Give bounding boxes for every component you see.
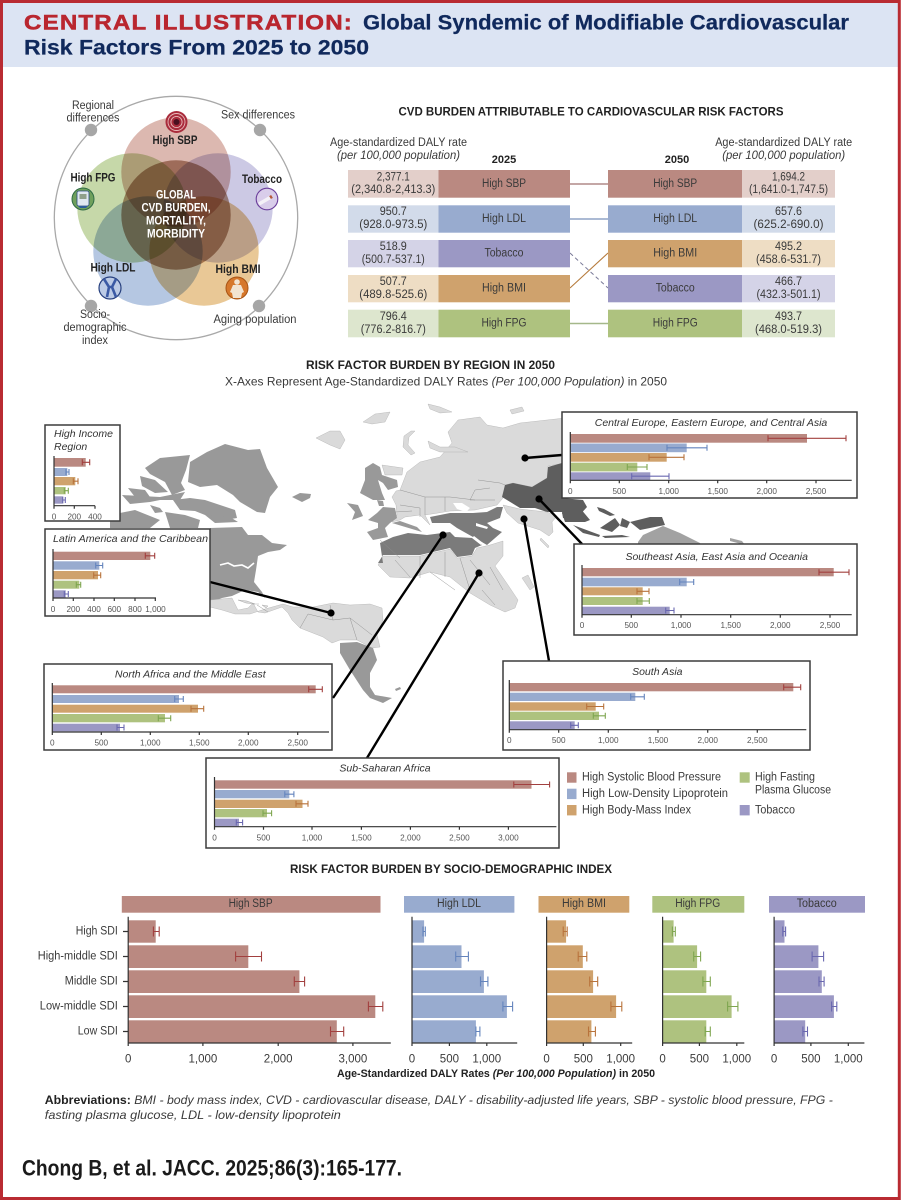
2050 column: High LDL bbox=[653, 213, 698, 225]
chart: Sub-Saharan Africa: 2,000 bbox=[400, 834, 421, 842]
chart: Central Europe, Eastern Europe, and Central Asia: 1,000 bbox=[658, 487, 679, 496]
risk factor labels: High LDL bbox=[90, 262, 136, 274]
abbreviations: fasting plasma glucose, LDL - low-density lipoprotein bbox=[45, 1108, 341, 1122]
column captions: Age-standardized DALY rate bbox=[330, 137, 467, 149]
chart: Southeast Asia, East Asia and Oceania: Southeast Asia, East Asia and Oceania bbox=[625, 551, 808, 563]
2025 column: (489.8-525.6) bbox=[359, 289, 427, 301]
venn circles bbox=[77, 117, 273, 306]
header band bbox=[3, 3, 898, 67]
chart: South Asia bbox=[503, 661, 810, 750]
2025 column: (2,340.8-2,413.3) bbox=[351, 184, 435, 196]
2025 column: 796.4 bbox=[380, 311, 407, 323]
chart: SDI High FPG: 0 bbox=[659, 1053, 666, 1065]
chart: SDI High SBP: 0 bbox=[125, 1053, 131, 1065]
context nodes bbox=[85, 124, 266, 312]
chart: Latin America and the Caribbean: 200 bbox=[66, 605, 81, 614]
risk factor labels: Tobacco bbox=[242, 174, 282, 186]
chart: SDI High FPG bbox=[652, 896, 751, 1065]
2025 column: High FPG bbox=[482, 318, 527, 330]
abbreviations: Abbreviations: BMI - body mass index, CVD - cardiovascular disease, DALY - disability-adjusted life years, SBP - systolic blood pressure, FPG - bbox=[45, 1093, 833, 1107]
chart: North Africa and the Middle East: 1,000 bbox=[140, 738, 161, 748]
chart: Sub-Saharan Africa: 1,000 bbox=[302, 834, 323, 842]
icon: cigarette bbox=[256, 188, 278, 210]
centre text bbox=[142, 187, 210, 241]
chart: Southeast Asia, East Asia and Oceania bbox=[574, 544, 857, 635]
chart: SDI High BMI: 1,000 bbox=[606, 1053, 635, 1065]
chart: Sub-Saharan Africa: 2,500 bbox=[449, 834, 470, 842]
2025 column: High BMI bbox=[482, 282, 526, 294]
chart: North Africa and the Middle East bbox=[44, 664, 332, 750]
chart: SDI High SBP bbox=[122, 896, 391, 1065]
2050 column bbox=[608, 170, 835, 337]
chart: Southeast Asia, East Asia and Oceania: 2,000 bbox=[770, 621, 791, 630]
chart: Central Europe, Eastern Europe, and Central Asia: Central Europe, Eastern Europe, and Central Asia bbox=[595, 417, 827, 429]
chart: Latin America and the Caribbean: Latin America and the Caribbean bbox=[53, 533, 208, 545]
chart: SDI row labels: Middle SDI bbox=[65, 975, 118, 987]
chart: Latin America and the Caribbean: 1,000 bbox=[145, 605, 166, 614]
chart: Latin America and the Caribbean: 400 bbox=[87, 605, 101, 614]
2025 column: (928.0-973.5) bbox=[359, 219, 427, 231]
caribbean islands bbox=[238, 600, 268, 608]
citation: Chong B, et al. JACC. 2025;86(3):165-177. bbox=[22, 1156, 402, 1180]
chart: SDI High SBP: 2,000 bbox=[264, 1053, 293, 1065]
2050 column: 466.7 bbox=[775, 276, 802, 288]
chart: High Income Region: 400 bbox=[88, 512, 102, 522]
2050 column: 493.7 bbox=[775, 311, 802, 323]
context labels: Socio- bbox=[80, 309, 110, 321]
title bbox=[24, 12, 849, 60]
heading: risk factor burden by region: X-Axes Represent Age-Standardized DALY Rates (Per 100,000 Population) in 2050 bbox=[225, 374, 667, 388]
legend: High Systolic Blood Pressure bbox=[582, 771, 721, 783]
context labels: index bbox=[82, 335, 108, 347]
risk factor labels: High SBP bbox=[152, 135, 198, 147]
chart: SDI row labels: Low SDI bbox=[78, 1025, 118, 1037]
chart: High Income Region: High Income bbox=[54, 428, 113, 440]
chart: North Africa and the Middle East: 500 bbox=[94, 738, 109, 748]
centre text: MORTALITY, bbox=[146, 214, 206, 228]
2025 column: 2,377.1 bbox=[377, 171, 410, 183]
2050 column: Tobacco bbox=[656, 282, 695, 294]
chart: SDI High FPG: High FPG bbox=[675, 898, 720, 910]
chart: SDI row labels: Low-middle SDI bbox=[40, 1000, 118, 1012]
chart: North Africa and the Middle East: 0 bbox=[50, 738, 55, 748]
chart: SDI High SBP: High SBP bbox=[229, 898, 273, 910]
russia and eastern europe bbox=[392, 417, 565, 525]
column captions: (per 100,000 population) bbox=[337, 150, 460, 162]
2050 column: High BMI bbox=[653, 248, 697, 260]
chart: SDI High BMI: High BMI bbox=[562, 898, 606, 910]
chart: SDI High LDL: 1,000 bbox=[472, 1053, 501, 1065]
chart: Latin America and the Caribbean: 800 bbox=[128, 605, 142, 614]
chart: SDI High SBP: 1,000 bbox=[189, 1053, 217, 1065]
latin america north bbox=[210, 598, 383, 648]
callout lines bbox=[210, 454, 582, 758]
chart: South Asia: South Asia bbox=[632, 666, 683, 678]
chart: SDI High LDL: 0 bbox=[409, 1053, 415, 1065]
2050 column: (432.3-501.1) bbox=[756, 289, 821, 301]
legend: High Low-Density Lipoprotein bbox=[582, 788, 728, 800]
chart: Southeast Asia, East Asia and Oceania: 1,000 bbox=[671, 621, 692, 630]
chart: SDI High LDL: High LDL bbox=[437, 898, 482, 910]
australia and new zealand bbox=[638, 526, 745, 546]
context labels: Sex differences bbox=[221, 109, 295, 121]
column captions: Age-standardized DALY rate bbox=[715, 137, 852, 149]
legend: High Body-Mass Index bbox=[582, 804, 691, 816]
chart: SDI Tobacco: 1,000 bbox=[834, 1053, 863, 1065]
chart: Latin America and the Caribbean: 600 bbox=[107, 605, 122, 614]
heading: risk factor burden by region bbox=[225, 360, 667, 388]
column captions bbox=[330, 137, 852, 166]
column captions: 2025 bbox=[492, 154, 516, 166]
chart: North Africa and the Middle East: North Africa and the Middle East bbox=[115, 669, 267, 681]
legend: Tobacco bbox=[755, 804, 795, 816]
icon: artery cross-section bbox=[166, 111, 188, 133]
panel: CVD burden table bbox=[330, 107, 852, 337]
chart: North Africa and the Middle East: 2,000 bbox=[238, 738, 259, 748]
chart: North Africa and the Middle East: 1,500 bbox=[189, 738, 210, 748]
chart: SDI High FPG: 500 bbox=[690, 1053, 709, 1065]
2050 column: 657.6 bbox=[775, 206, 802, 218]
chart: Southeast Asia, East Asia and Oceania: 500 bbox=[624, 621, 639, 630]
abbreviations bbox=[45, 1093, 833, 1122]
chart: Sub-Saharan Africa: 0 bbox=[212, 834, 217, 842]
context labels: Regional bbox=[72, 100, 114, 112]
2025 column: 507.7 bbox=[380, 276, 407, 288]
x axis title: Age-Standardized DALY Rates (Per 100,000 Population) in 2050 bbox=[337, 1068, 655, 1080]
heading: risk factor burden by SDI: RISK FACTOR BURDEN BY SOCIO-DEMOGRAPHIC INDEX bbox=[290, 864, 612, 876]
chart: SDI Tobacco: 500 bbox=[801, 1053, 820, 1065]
chart: Central Europe, Eastern Europe, and Central Asia bbox=[562, 412, 857, 498]
2050 column: 1,694.2 bbox=[772, 171, 805, 183]
inland seas bbox=[453, 503, 488, 545]
2025 column: High SBP bbox=[482, 178, 526, 190]
chart: Central Europe, Eastern Europe, and Central Asia: 1,500 bbox=[707, 487, 728, 496]
chart: SDI High FPG: 1,000 bbox=[722, 1053, 751, 1065]
title: CENTRAL ILLUSTRATION: bbox=[24, 12, 353, 34]
context labels: differences bbox=[66, 113, 120, 125]
heading: risk factor burden by region: RISK FACTOR BURDEN BY REGION IN 2050 bbox=[306, 360, 555, 372]
2050 column: (625.2-690.0) bbox=[754, 219, 824, 231]
chart: Sub-Saharan Africa: 3,000 bbox=[498, 834, 519, 842]
chart: SDI Tobacco: 0 bbox=[771, 1053, 777, 1065]
chart: South Asia: 0 bbox=[507, 736, 512, 745]
centre text: MORBIDITY bbox=[147, 227, 205, 241]
chart: SDI High BMI bbox=[538, 896, 635, 1065]
great lakes bbox=[220, 563, 254, 568]
chart: South Asia: 2,000 bbox=[697, 736, 718, 745]
chart: SDI High SBP: 3,000 bbox=[339, 1053, 367, 1065]
2050 column: 495.2 bbox=[775, 241, 802, 253]
chart: South Asia: 1,000 bbox=[598, 736, 619, 745]
chart: Southeast Asia, East Asia and Oceania: 2,500 bbox=[820, 621, 841, 630]
column captions: 2050 bbox=[665, 154, 689, 166]
2025 column: 518.9 bbox=[380, 241, 407, 253]
2025 column: (776.2-816.7) bbox=[361, 324, 426, 336]
chart: SDI High LDL: 500 bbox=[440, 1053, 459, 1065]
chart: SDI Tobacco bbox=[769, 896, 865, 1065]
2050 column: High SBP bbox=[653, 178, 697, 190]
2025 column bbox=[348, 170, 570, 337]
context labels bbox=[64, 100, 296, 347]
south asia bbox=[503, 505, 557, 536]
chart: Sub-Saharan Africa bbox=[206, 758, 559, 848]
2050 column: High FPG bbox=[653, 318, 698, 330]
chart: SDI High LDL bbox=[404, 896, 517, 1065]
legend: Plasma Glucose bbox=[755, 784, 831, 796]
falklands bbox=[395, 687, 401, 691]
world map bbox=[110, 404, 745, 703]
risk factor labels: High BMI bbox=[216, 264, 260, 276]
chart: Latin America and the Caribbean: 0 bbox=[51, 605, 56, 614]
heading: CVD BURDEN ATTRIBUTABLE TO CARDIOVASCULAR RISK FACTORS bbox=[398, 107, 784, 119]
north america and greenland bbox=[110, 444, 311, 603]
2025 column: (500.7-537.1) bbox=[362, 254, 425, 266]
chart: SDI High BMI: 500 bbox=[574, 1053, 593, 1065]
centre text: CVD BURDEN, bbox=[142, 201, 210, 215]
chart: Central Europe, Eastern Europe, and Central Asia: 0 bbox=[568, 487, 573, 496]
chart: SDI row labels: High SDI bbox=[76, 925, 118, 937]
2050 column: (1,641.0-1,747.5) bbox=[749, 184, 828, 196]
chart: SDI High BMI: 0 bbox=[543, 1053, 550, 1065]
2050 column: (458.6-531.7) bbox=[756, 254, 821, 266]
madagascar bbox=[522, 575, 534, 590]
chart: High Income Region bbox=[45, 425, 120, 522]
connectors bbox=[570, 184, 608, 324]
chart: South Asia: 2,500 bbox=[747, 736, 768, 745]
title: Global Syndemic of Modifiable Cardiovascular bbox=[363, 12, 849, 34]
chart: Central Europe, Eastern Europe, and Central Asia: 2,500 bbox=[806, 487, 827, 496]
legend: High Fasting bbox=[755, 771, 815, 783]
chart: Sub-Saharan Africa: Sub-Saharan Africa bbox=[339, 762, 431, 774]
southeast asia and oceania bbox=[562, 507, 665, 538]
context labels: demographic bbox=[64, 322, 127, 334]
2025 column: Tobacco bbox=[484, 248, 524, 260]
north africa and middle east bbox=[378, 507, 503, 563]
chart: High Income Region: 200 bbox=[67, 512, 82, 522]
chart: Central Europe, Eastern Europe, and Central Asia: 500 bbox=[612, 487, 627, 496]
chart: North Africa and the Middle East: 2,500 bbox=[287, 738, 308, 748]
chart: High Income Region: 0 bbox=[52, 512, 57, 522]
venn diagram panel bbox=[54, 96, 298, 347]
chart: SDI row labels: High-middle SDI bbox=[38, 950, 118, 962]
risk factor labels bbox=[70, 135, 282, 276]
northern scandinavia and arctic islands bbox=[316, 404, 524, 475]
country borders bbox=[257, 480, 505, 640]
southern cone bbox=[340, 642, 392, 703]
column captions: (per 100,000 population) bbox=[722, 150, 845, 162]
africa sub-saharan bbox=[378, 541, 518, 612]
chart: Latin America and the Caribbean bbox=[45, 529, 210, 616]
scandinavia and western europe bbox=[347, 463, 422, 540]
chart: Southeast Asia, East Asia and Oceania: 1,500 bbox=[720, 621, 741, 630]
chart: Sub-Saharan Africa: 500 bbox=[257, 834, 271, 842]
chart: Central Europe, Eastern Europe, and Central Asia: 2,000 bbox=[756, 487, 777, 496]
china and east asia bbox=[502, 463, 587, 518]
icon: body figure bbox=[226, 277, 248, 299]
risk factor labels: High FPG bbox=[70, 172, 116, 184]
legend bbox=[567, 771, 831, 816]
title: Risk Factors From 2025 to 2050 bbox=[24, 36, 369, 60]
chart: High Income Region: Region bbox=[54, 441, 87, 453]
icon: artery bbox=[99, 277, 121, 299]
chart: Sub-Saharan Africa: 1,500 bbox=[351, 834, 372, 842]
2050 column: (468.0-519.3) bbox=[755, 324, 822, 336]
chart: SDI row labels bbox=[38, 925, 118, 1037]
context labels: Aging population bbox=[214, 314, 296, 326]
2025 column: High LDL bbox=[482, 213, 527, 225]
sri lanka bbox=[540, 538, 549, 548]
centre text: GLOBAL bbox=[156, 187, 196, 201]
icon: glucose meter bbox=[72, 188, 94, 210]
chart: SDI Tobacco: Tobacco bbox=[797, 898, 837, 910]
2025 column: 950.7 bbox=[380, 206, 407, 218]
chart: South Asia: 500 bbox=[552, 736, 566, 745]
chart: Southeast Asia, East Asia and Oceania: 0 bbox=[580, 621, 585, 630]
chart: South Asia: 1,500 bbox=[648, 736, 669, 745]
